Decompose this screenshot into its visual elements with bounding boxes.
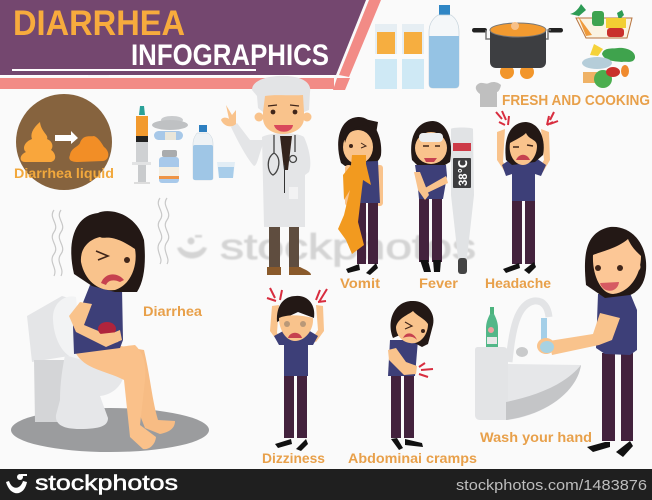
legs — [391, 376, 401, 438]
near leg and thigh — [75, 345, 156, 449]
hair — [71, 211, 145, 292]
bowl shade — [506, 365, 581, 420]
label: Diarrhea liquid — [14, 165, 114, 181]
shoes — [346, 264, 360, 273]
legs — [269, 225, 280, 269]
drinks — [375, 5, 459, 89]
character: abdominal cramps — [388, 301, 433, 450]
ears — [254, 112, 264, 122]
label: headache: Headache — [485, 275, 551, 291]
shirt — [351, 161, 380, 203]
character: headache — [496, 111, 558, 274]
face — [279, 315, 313, 341]
faucet — [509, 301, 549, 362]
character: fever — [411, 121, 451, 272]
character: vomit — [338, 117, 383, 275]
character: washing hands — [537, 227, 646, 457]
hands with foam — [537, 338, 555, 354]
watermark — [177, 226, 476, 267]
character: dizziness — [267, 288, 327, 451]
header banner — [0, 0, 381, 90]
panel: diarrhea liquid badge — [14, 94, 114, 190]
shirt — [502, 158, 546, 201]
arm — [549, 313, 620, 355]
arm on belly — [69, 302, 122, 347]
watermark: stockphotos — [220, 226, 476, 267]
face — [343, 130, 373, 164]
icon: large water bottle — [429, 5, 459, 88]
shoes — [587, 442, 610, 452]
shirt — [73, 285, 123, 354]
eyes — [595, 265, 601, 271]
hair — [252, 76, 310, 112]
shoes — [267, 267, 281, 275]
hair — [338, 117, 381, 166]
face — [81, 237, 136, 290]
icon: arrow — [55, 131, 78, 144]
shoes — [391, 438, 403, 450]
legs — [419, 198, 429, 262]
water stream — [541, 318, 547, 348]
shoes — [275, 439, 292, 448]
footer url: stockphotos.com/1483876 — [456, 477, 647, 494]
label: fever: Fever — [419, 275, 459, 291]
label: abdominal cramps: Abdominai cramps — [348, 450, 477, 466]
soap bottle — [486, 307, 498, 347]
icon: glass of water — [217, 162, 235, 178]
icon: medicine bottle — [159, 150, 179, 183]
label: vomit: Vomit — [340, 275, 380, 291]
eyes — [96, 251, 108, 260]
medicines — [132, 106, 235, 184]
arm raised — [231, 123, 265, 166]
face — [593, 239, 641, 294]
arms — [414, 172, 448, 200]
legs — [602, 353, 615, 441]
hand — [221, 105, 236, 126]
coat — [262, 133, 310, 227]
icon: juice glasses — [375, 24, 424, 54]
pain bolts — [496, 111, 558, 125]
sink — [475, 301, 581, 420]
logo text: stockphotos — [35, 472, 178, 495]
icon: vegetable basket — [570, 4, 632, 38]
mouth — [600, 282, 619, 291]
shirt — [596, 293, 637, 355]
icon: water glasses — [375, 59, 424, 89]
shoes — [503, 263, 520, 273]
vomit stream — [338, 155, 371, 254]
shirt — [388, 340, 418, 376]
icon: formed stool — [21, 122, 55, 162]
hair — [411, 121, 451, 165]
arms — [345, 165, 352, 206]
face — [396, 311, 428, 343]
icon: liquid stool — [69, 136, 108, 162]
sink back — [475, 347, 508, 420]
icon: thermometer — [451, 128, 474, 274]
eyes and mouth — [271, 110, 275, 114]
legs — [284, 376, 294, 438]
icon: syringe — [132, 106, 151, 184]
character: doctor — [221, 76, 312, 275]
hair — [391, 301, 433, 347]
belly pain spot — [98, 322, 116, 336]
title: DIARRHEA — [13, 4, 185, 43]
forehead cloth — [419, 133, 443, 142]
icon: water bottle — [193, 125, 213, 180]
mouth — [101, 274, 124, 285]
arm — [388, 348, 417, 375]
character: diarrhea on toilet — [11, 198, 209, 452]
label: diarrhea: Diarrhea — [143, 303, 202, 319]
tie — [280, 136, 292, 170]
arms — [270, 305, 283, 342]
hair — [585, 227, 646, 298]
label: dizziness: Dizziness — [262, 450, 325, 466]
hair — [277, 296, 314, 322]
reading: 38℃ — [456, 160, 470, 186]
icon: cooking pot — [472, 22, 563, 79]
icon: fresh food pile — [582, 44, 635, 88]
hair — [505, 122, 544, 165]
shoes — [420, 260, 431, 272]
shirt — [415, 165, 447, 199]
far leg — [115, 345, 175, 434]
face — [415, 132, 447, 164]
hand — [100, 332, 118, 345]
toilet bowl — [56, 355, 124, 429]
face — [263, 95, 304, 134]
toilet seat lid — [53, 296, 82, 360]
face — [510, 133, 537, 165]
footer bar — [0, 469, 652, 500]
arms — [497, 129, 510, 172]
pain bolts — [267, 288, 327, 302]
subtitle: INFOGRAPHICS — [131, 39, 329, 72]
shirt — [274, 330, 318, 376]
stink lines right — [158, 198, 169, 264]
legs — [512, 200, 522, 264]
cramp bolts — [419, 363, 433, 377]
legs — [357, 202, 366, 264]
pocket — [289, 187, 298, 199]
label: wash your hand: Wash your hand — [480, 429, 592, 445]
floor shadow — [11, 408, 209, 452]
logo mark — [6, 474, 27, 493]
stink lines left — [52, 210, 63, 276]
icon: pills — [152, 116, 188, 140]
stethoscope — [268, 135, 296, 175]
icon: chef hat — [476, 82, 501, 107]
toilet tank — [27, 296, 75, 362]
